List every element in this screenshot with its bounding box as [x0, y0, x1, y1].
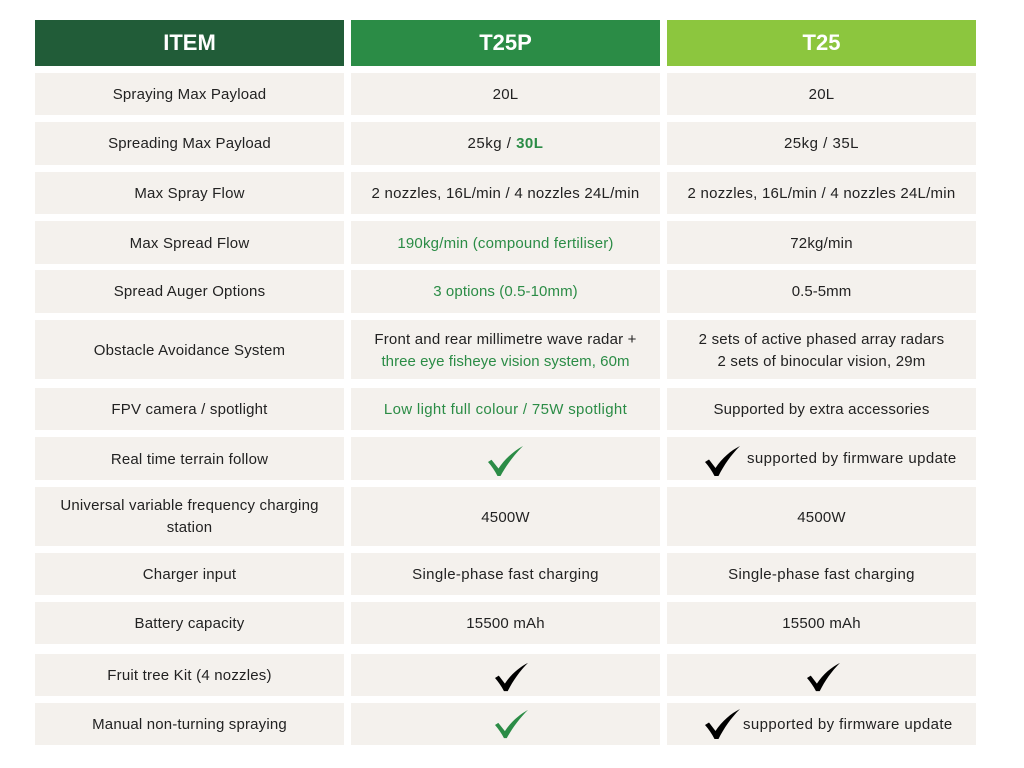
- header: T25P: T25P: [479, 30, 532, 55]
- T25 manual spraying: [667, 703, 976, 745]
- row label: Max Spread Flow: Max Spread Flow: [130, 234, 249, 252]
- T25 fruit tree kit check: [667, 654, 976, 696]
- T25P spread flow: [351, 221, 660, 264]
- row label: Fruit tree Kit (4 nozzles): [35, 654, 344, 696]
- T25P obstacle avoidance: three eye fisheye vision system, 60m: [381, 352, 630, 370]
- T25 charging station: [667, 487, 976, 546]
- T25 charger input: [667, 553, 976, 595]
- T25 spreading payload: [667, 122, 976, 165]
- row label: Charger input: Charger input: [143, 566, 236, 583]
- T25P charger input: Single-phase fast charging: [412, 566, 599, 583]
- row label: Manual non-turning spraying: Manual non-turning spraying: [92, 716, 287, 733]
- row label: FPV camera / spotlight: [35, 388, 344, 430]
- T25 FPV camera: [667, 388, 976, 430]
- T25P auger options: [351, 270, 660, 313]
- T25 obstacle avoidance: [667, 320, 976, 379]
- T25 auger options: 0.5-5mm: [792, 283, 851, 300]
- row label: Spreading Max Payload: [35, 122, 344, 165]
- row label: Spraying Max Payload: Spraying Max Payload: [113, 86, 266, 103]
- row label: Charger input: [35, 553, 344, 595]
- T25 charger input: Single-phase fast charging: [728, 566, 915, 583]
- T25 manual spraying: supported by firmware update: [743, 716, 953, 733]
- row label: Obstacle Avoidance System: [35, 320, 344, 379]
- T25 FPV camera: Supported by extra accessories: [713, 401, 930, 418]
- row label: Spraying Max Payload: [35, 73, 344, 115]
- T25 terrain follow: supported by firmware update: [747, 450, 957, 467]
- row label: Spread Auger Options: Spread Auger Options: [114, 283, 265, 300]
- T25P battery capacity: 15500 mAh: [466, 615, 545, 632]
- row label: Battery capacity: [35, 602, 344, 644]
- T25P auger options: 3 options (0.5-10mm): [433, 283, 578, 300]
- header: ITEM: ITEM: [163, 30, 216, 55]
- T25 battery capacity: 15500 mAh: [782, 615, 861, 632]
- T25P spray flow: 2 nozzles, 16L/min / 4 nozzles 24L/min: [372, 185, 639, 202]
- row label: Obstacle Avoidance System: Obstacle Avoidance System: [94, 342, 285, 358]
- row label: Spread Auger Options: [35, 270, 344, 313]
- row label: Max Spray Flow: [35, 172, 344, 214]
- row label: Max Spread Flow: [35, 221, 344, 264]
- T25P FPV camera: [351, 388, 660, 430]
- T25P charging station: [351, 487, 660, 546]
- T25 auger options: [667, 270, 976, 313]
- row label: Universal variable frequency charging station: Universal variable frequency charging: [60, 496, 319, 514]
- row label: Spreading Max Payload: Spreading Max Payload: [108, 135, 271, 152]
- T25 spraying payload: 20L: [809, 86, 834, 103]
- T25P battery capacity: [351, 602, 660, 644]
- T25 terrain follow: [667, 437, 976, 480]
- T25P spray flow: [351, 172, 660, 214]
- header: T25: T25: [803, 30, 840, 55]
- T25P FPV camera: Low light full colour / 75W spotlight: [384, 401, 627, 418]
- row label: Manual non-turning spraying: [35, 703, 344, 745]
- row label: Universal variable frequency charging station: station: [167, 518, 212, 536]
- T25P charger input: [351, 553, 660, 595]
- header: T25: [667, 20, 976, 66]
- T25 obstacle avoidance: 2 sets of binocular vision, 29m: [718, 352, 925, 370]
- row label: FPV camera / spotlight: FPV camera / spotlight: [111, 401, 268, 418]
- T25 spray flow: 2 nozzles, 16L/min / 4 nozzles 24L/min: [688, 185, 955, 202]
- T25 spread flow: [667, 221, 976, 264]
- T25P fruit tree kit check: [351, 654, 660, 696]
- header: ITEM: [35, 20, 344, 66]
- T25 obstacle avoidance: 2 sets of active phased array radars: [699, 330, 944, 348]
- T25P obstacle avoidance: Front and rear millimetre wave radar +: [374, 330, 637, 348]
- T25 spray flow: [667, 172, 976, 214]
- row label: Real time terrain follow: [35, 437, 344, 480]
- row label: Real time terrain follow: Real time terrain follow: [111, 450, 268, 468]
- T25P obstacle avoidance: [351, 320, 660, 379]
- row label: Max Spray Flow: Max Spray Flow: [134, 185, 245, 202]
- row label: Fruit tree Kit (4 nozzles): Fruit tree Kit (4 nozzles): [107, 667, 272, 684]
- T25 spreading payload: 25kg / 35L: [784, 135, 859, 152]
- row label: Battery capacity: Battery capacity: [135, 615, 244, 632]
- T25P spraying payload: 20L: [493, 86, 518, 103]
- T25P spreading payload: 25kg / 30L: [468, 135, 543, 152]
- T25P manual spraying check: [351, 703, 660, 745]
- T25P spreading payload: [351, 122, 660, 165]
- T25P spread flow: 190kg/min (compound fertiliser): [397, 234, 614, 252]
- T25 battery capacity: [667, 602, 976, 644]
- header: T25P: [351, 20, 660, 66]
- T25 spraying payload: [667, 73, 976, 115]
- T25P spraying payload: [351, 73, 660, 115]
- T25P terrain follow check: [351, 437, 660, 480]
- T25 spread flow: 72kg/min: [790, 234, 853, 252]
- row label: Universal variable frequency charging station: [35, 487, 344, 546]
- T25 charging station: 4500W: [797, 508, 846, 526]
- T25P charging station: 4500W: [481, 508, 530, 526]
